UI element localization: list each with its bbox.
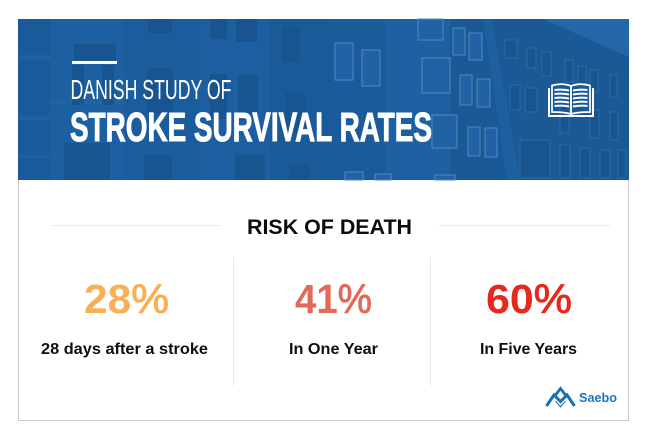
label: one year: In One Year [289,341,378,358]
logo: Saebo [546,388,617,407]
stat: 60 percent [480,276,577,358]
stat: 41 percent: 41% [295,276,372,322]
stat: 28 percent: 28% [84,276,169,322]
heading: risk of death: RISK OF DEATH [247,216,412,239]
label: 28 days: 28 days after a stroke [41,341,208,358]
panel: header with building photo [18,19,629,180]
title line two: STROKE SURVIVAL RATES [70,104,432,150]
label: five years: In Five Years [480,341,577,358]
stat: 60 percent: 60% [486,276,572,322]
logo: Saebo: Saebo [579,390,617,405]
icon: open book [549,84,593,116]
stat: 28 percent [41,276,208,358]
title line one: DANISH STUDY OF [70,74,232,105]
decorative accent bar [72,61,117,64]
stat: 41 percent [289,276,378,358]
panel: card [18,100,628,420]
